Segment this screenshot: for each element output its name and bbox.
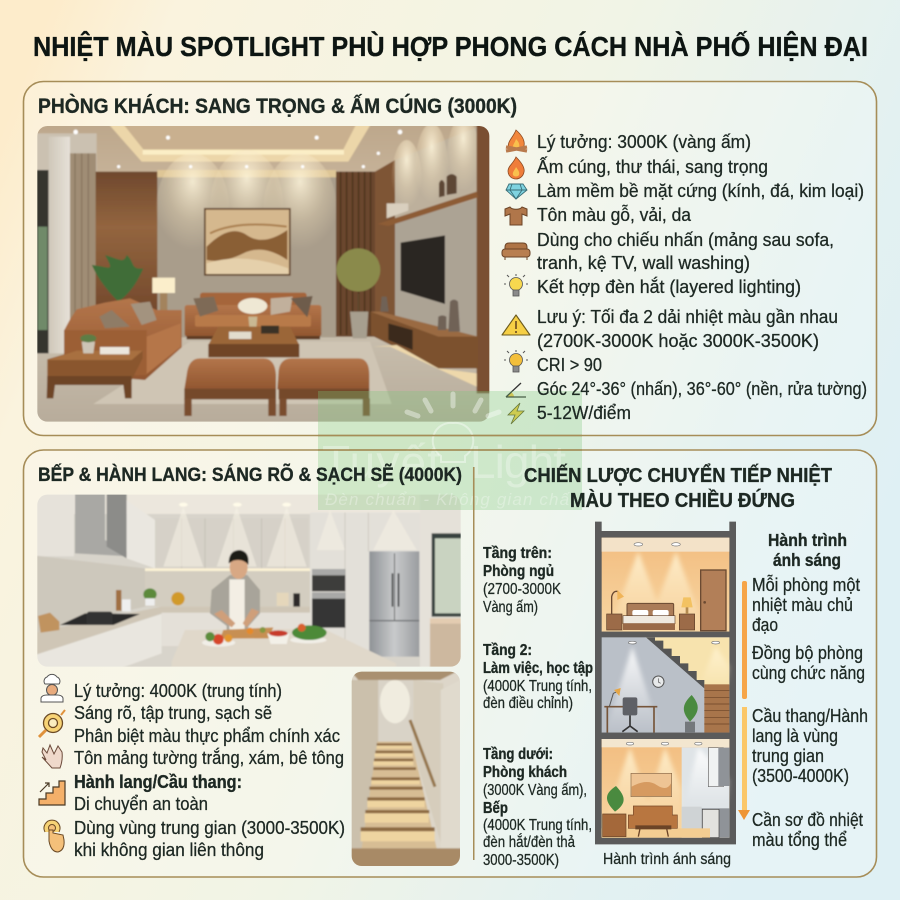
heading: living room: PHÒNG KHÁCH: SANG TRỌNG & ẤM CÚNG (3000K) (38, 94, 517, 118)
journey notes: (3500-4000K) (752, 765, 849, 786)
heading: vertical strategy (524, 463, 832, 512)
journey notes: nhiệt màu chủ (752, 594, 853, 615)
label: ground floor: (4000K Trung tính, (483, 817, 592, 834)
icon: hand (42, 745, 62, 768)
label: top floor: Vàng ấm) (483, 599, 538, 616)
icon: tap (44, 820, 64, 852)
icon: chef (41, 674, 63, 702)
heading: light journey: ánh sáng (773, 550, 841, 570)
room: living and kitchen (602, 739, 729, 838)
feature list: living room: Dùng cho chiếu nhấn (mảng sau sofa, (537, 229, 834, 250)
feature list: kitchen: Dùng vùng trung gian (3000-3500K) (74, 817, 345, 838)
journey notes: đạo (752, 614, 778, 635)
feature list: kitchen: Sáng rõ, tập trung, sạch sẽ (74, 702, 272, 723)
watermark: Light (470, 436, 566, 488)
label: second floor: Làm việc, học tập (483, 660, 593, 677)
journey notes: Đồng bộ phòng (752, 642, 863, 663)
icon: shirt (505, 207, 527, 225)
icon: lightning (508, 403, 524, 424)
feature list: living room: Lưu ý: Tối đa 2 dải nhiệt màu gần nhau (537, 306, 838, 327)
watermark: Tuyết (322, 436, 440, 488)
icon: angle (506, 383, 526, 397)
journey notes: Cần sơ đồ nhiệt (752, 809, 863, 830)
feature list: living room: Ấm cúng, thư thái, sang trọng (537, 156, 768, 177)
journey notes: Cầu thang/Hành (752, 705, 868, 726)
label: ground floor: (3000K Vàng ấm), (483, 782, 587, 799)
feature list: kitchen: Lý tưởng: 4000K (trung tính) (74, 680, 282, 701)
feature list: living room: CRI > 90 (537, 354, 602, 375)
feature list: kitchen (74, 680, 345, 860)
label: second floor: (4000K Trung tính, (483, 678, 592, 695)
feature list: living room: Tôn màu gỗ, vải, da (537, 204, 692, 225)
label: top floor: (2700-3000K (483, 581, 561, 598)
label: second floor (483, 642, 593, 712)
feature list: kitchen: Di chuyển an toàn (74, 793, 208, 814)
icon: bulb gold (504, 350, 528, 372)
journey notes (752, 574, 868, 850)
house cross-section diagram (595, 522, 736, 844)
heading: kitchen: BẾP & HÀNH LANG: SÁNG RÕ & SẠCH SẼ (4000K) (38, 462, 462, 486)
icon: warning (502, 315, 530, 335)
icon: sofa (502, 243, 530, 260)
heading: vertical strategy: MÀU THEO CHIỀU ĐỨNG (570, 488, 795, 512)
journey notes: trung gian (752, 745, 824, 766)
label: ground floor: đèn hắt/đèn thả (483, 832, 575, 851)
panel: living room (24, 82, 876, 436)
label: ground floor: Phòng khách (483, 764, 567, 781)
heading: vertical strategy: CHIẾN LƯỢC CHUYỂN TIẾP NHIỆT (524, 463, 832, 487)
photo: living room (30, 117, 497, 430)
label: ground floor: Tầng dưới: (483, 746, 553, 763)
photo: kitchen (30, 490, 467, 673)
label: second floor: Tầng 2: (483, 642, 532, 659)
icon: bulb (504, 274, 528, 296)
heading: light journey (768, 530, 847, 570)
photo: stair corridor (352, 672, 460, 866)
room: study and stairs (602, 637, 729, 733)
room: bedroom (602, 538, 729, 632)
icon: stairs (39, 781, 65, 805)
feature list: kitchen: Phân biệt màu thực phẩm chính xác (74, 725, 340, 746)
feature list: living room (537, 131, 867, 423)
journey notes: màu tổng thể (752, 829, 847, 850)
feature list: living room: tranh, kệ TV, wall washing) (537, 252, 750, 273)
label: second floor: đèn điều chỉnh) (483, 695, 573, 712)
panel: kitchen and vertical strategy (24, 450, 876, 877)
feature list: living room: Kết hợp đèn hắt (layered lighting) (537, 276, 801, 297)
journey notes: Mỗi phòng một (752, 574, 860, 595)
watermark: Đèn chuẩn - Không gian chất (325, 490, 576, 509)
feature list: kitchen: Hành lang/Cầu thang: (74, 771, 242, 792)
floor labels (483, 545, 593, 869)
journey notes: lang là vùng (752, 725, 838, 746)
feature list: kitchen: khi không gian liên thông (74, 839, 264, 860)
feature list: living room: (2700K-3000K hoặc 3000K-3500K) (537, 330, 819, 351)
heading: light journey: Hành trình (768, 530, 847, 550)
icon: flame (508, 157, 524, 179)
arrow: journey (738, 581, 750, 820)
journey notes: cùng chức năng (752, 662, 865, 683)
label: ground floor: 3000-3500K) (483, 852, 559, 869)
icon: diamond (506, 184, 527, 199)
feature list: living room: 5-12W/điểm (537, 402, 631, 423)
icon: campfire (506, 130, 527, 151)
label: ground floor (483, 746, 592, 869)
feature list: living room: Lý tưởng: 3000K (vàng ấm) (537, 131, 751, 152)
icon: magnifier (39, 710, 65, 737)
feature list: living room: Làm mềm bề mặt cứng (kính, đá, kim loại) (537, 180, 864, 201)
feature list: kitchen: Tôn mảng tường trắng, xám, bê tông (74, 747, 344, 768)
label: top floor: Phòng ngủ (483, 563, 554, 580)
label: top floor (483, 545, 561, 616)
caption: house diagram: Hành trình ánh sáng (603, 851, 731, 868)
label: top floor: Tầng trên: (483, 545, 552, 562)
watermark (318, 391, 582, 510)
label: ground floor: Bếp (483, 800, 508, 817)
